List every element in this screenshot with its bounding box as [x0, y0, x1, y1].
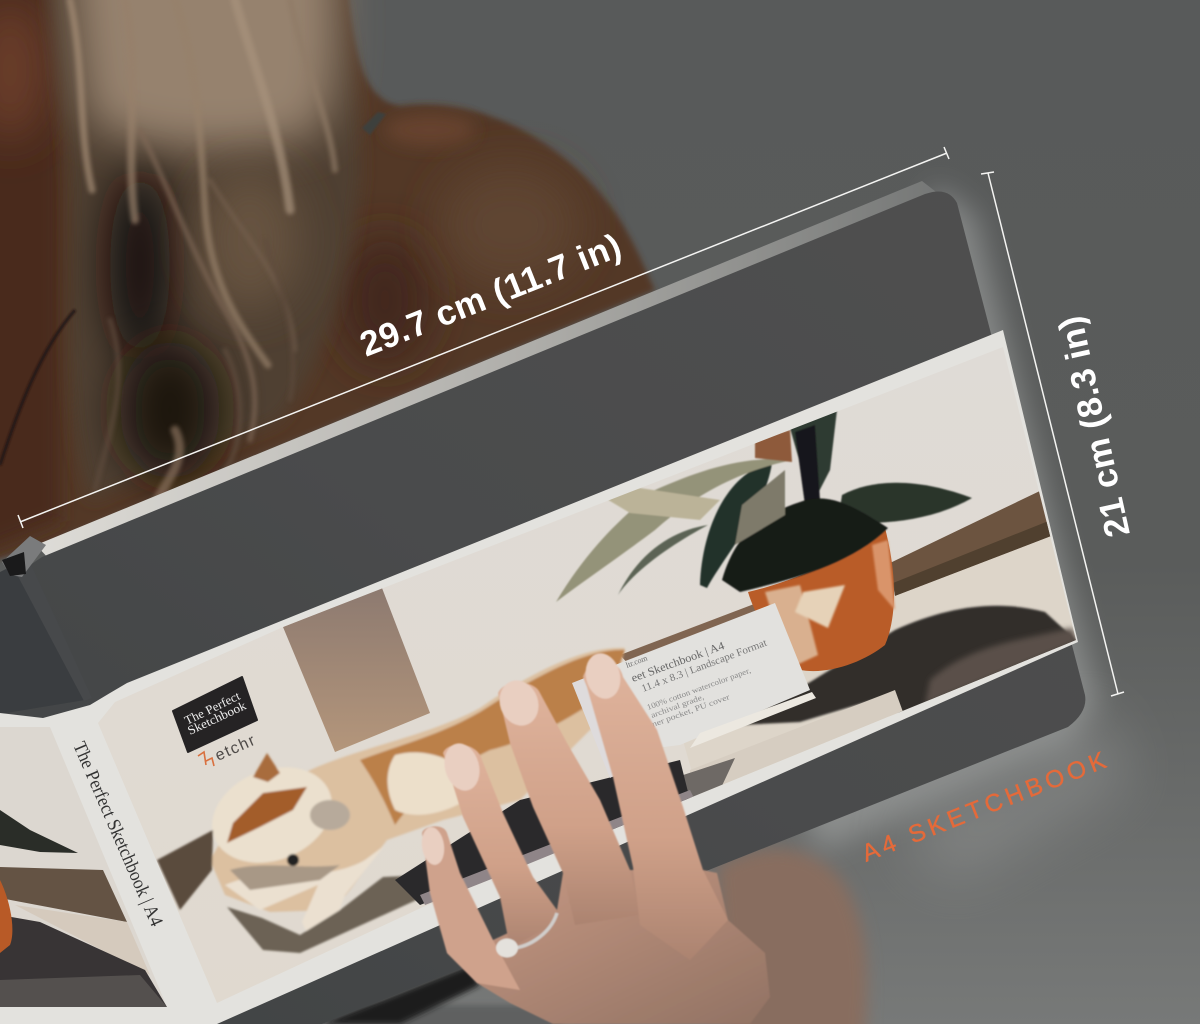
card white strip: [572, 660, 650, 778]
card: archival grade,: [650, 692, 705, 720]
artwork: wooden sill: [890, 488, 1054, 596]
necklace cord: [0, 310, 75, 465]
card: 100% cotton watercolor paper,: [646, 666, 752, 712]
artwork: column: [283, 588, 430, 752]
wrapper: paper band: [0, 330, 1090, 1024]
artwork: cat legs: [225, 845, 385, 935]
black label: The Perfect: [182, 689, 243, 728]
skin on the left: [0, 0, 60, 560]
hand holding the book: [419, 650, 770, 1024]
card: 11.4 x 8.3 | Landscape Format: [640, 638, 769, 695]
dimension: width: [18, 147, 949, 528]
finger: index: [583, 660, 728, 960]
hair mass: [48, 0, 360, 500]
caption: A4 sketchbook: A4 SKETCHBOOK: [858, 746, 1114, 868]
fingernails: [419, 650, 625, 866]
card: eet Sketchbook | A4: [630, 640, 726, 685]
clothing bottom: [322, 1005, 562, 1024]
spine: [0, 562, 85, 714]
book glow: [780, 185, 1130, 880]
finger: pinky: [422, 826, 520, 990]
left artwork flap: [0, 720, 170, 1010]
card face: [615, 603, 810, 750]
black label: [173, 677, 257, 752]
label: 21 cm (8.3 in): 21 cm (8.3 in): [1051, 313, 1138, 541]
label: 29.7 cm (11.7 in): 29.7 cm (11.7 in): [355, 226, 626, 364]
shadow under cover: [322, 965, 480, 1024]
artwork: brown bed: [157, 830, 213, 910]
dimension: height: [981, 172, 1138, 696]
artwork: plant leaves: [556, 410, 972, 602]
artwork: cat head: [211, 766, 332, 864]
hair strands: [70, 0, 335, 505]
artwork: dark floor band: [395, 760, 690, 905]
artwork: shadow under pot: [740, 606, 1078, 725]
spine title: The Perfect Sketchbook | A4: [68, 739, 167, 930]
etchr logo: etchr: [213, 732, 259, 765]
finger: middle: [498, 682, 640, 925]
finger: ring: [443, 745, 557, 948]
background photo: blurred woman: [0, 0, 867, 1024]
card: ner pocket, PU cover: [651, 692, 731, 729]
forearm: [717, 849, 867, 1024]
black label: Sketchbook: [185, 698, 249, 738]
wrapper artwork: [90, 330, 1090, 1010]
palm: [447, 870, 770, 1024]
shoulder and torso: [0, 0, 655, 570]
ribbon and headband: [2, 536, 46, 577]
card: [572, 603, 816, 778]
cover: [0, 191, 1085, 1024]
artwork: terracotta pot: [748, 528, 894, 671]
top strap: [362, 112, 386, 135]
page block: [36, 181, 940, 560]
card text: ltr.com: [624, 653, 649, 670]
artwork: cat body: [157, 648, 625, 953]
artwork: cream floor: [684, 536, 1072, 769]
sketchbook: [0, 181, 1090, 1024]
ring: [496, 913, 557, 958]
